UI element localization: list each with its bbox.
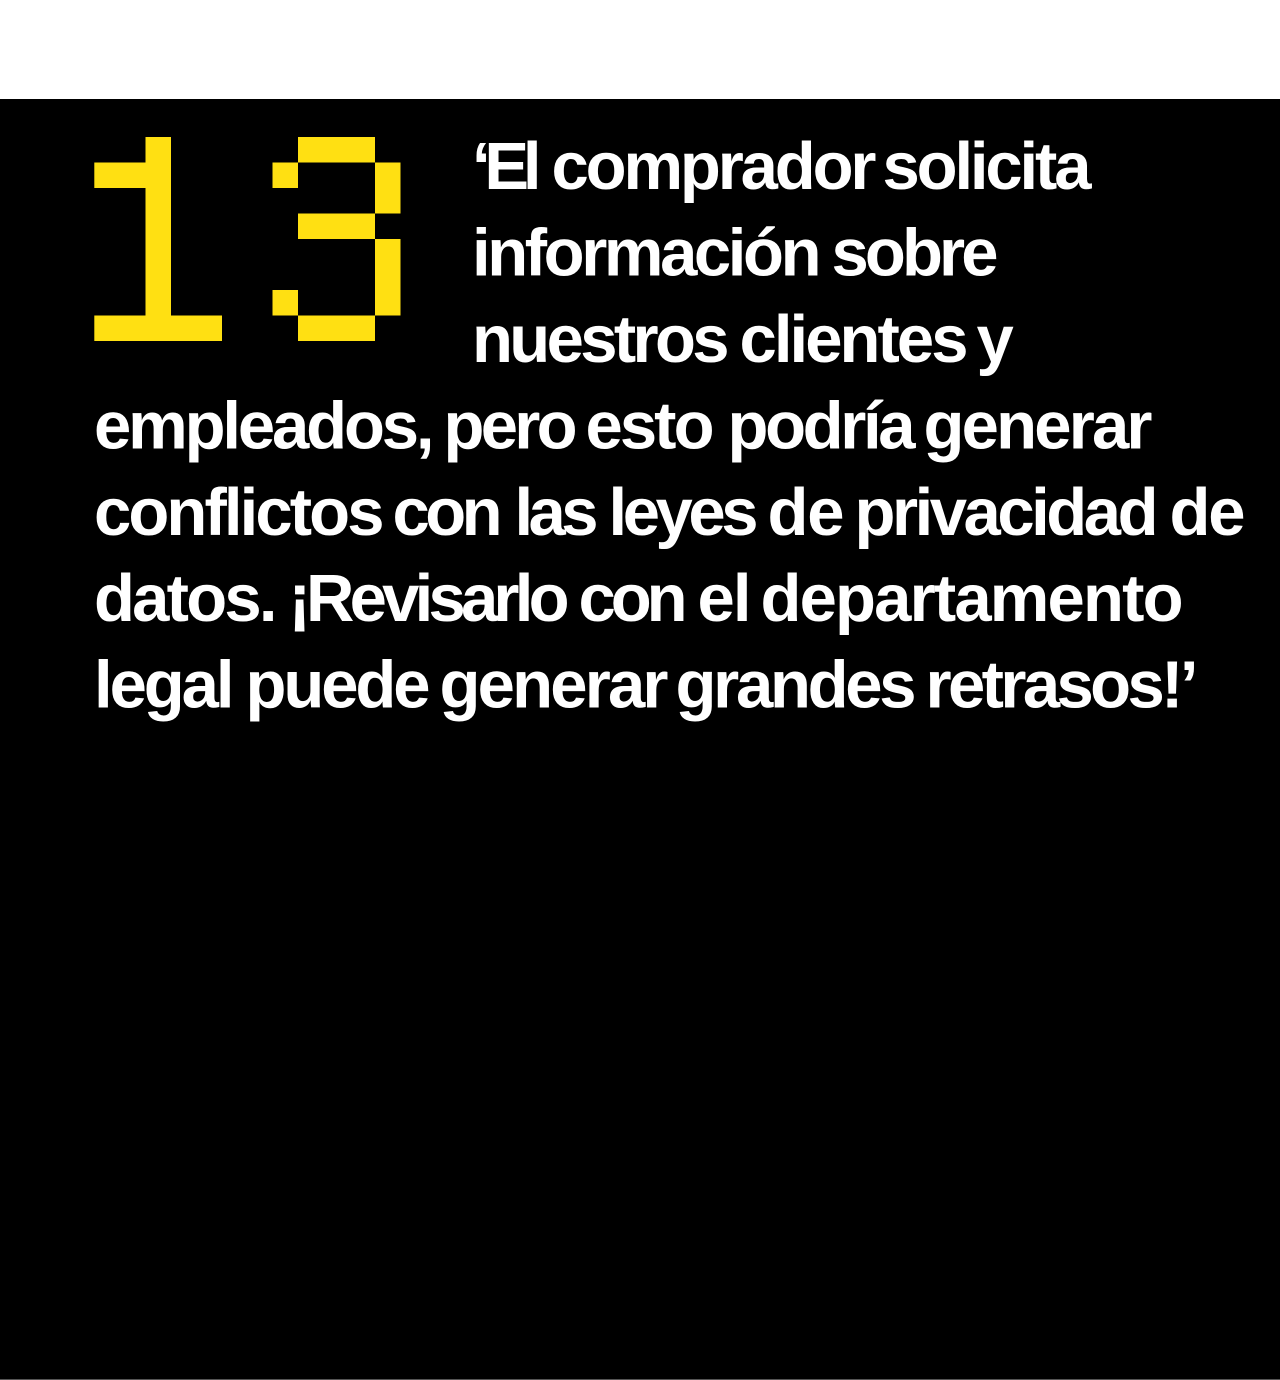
quote text: ‘El	[472, 129, 542, 204]
quote text: datos.	[94, 561, 278, 636]
quote text: legal	[94, 648, 234, 722]
quote text	[94, 129, 1246, 722]
quote text: de	[1170, 475, 1246, 550]
quote text: departamento	[760, 561, 1184, 636]
quote text: generar	[440, 648, 668, 722]
quote text: nuestros	[472, 302, 730, 377]
quote text: solicita	[882, 129, 1092, 204]
quote text: pero	[444, 388, 578, 464]
quote text: grandes	[676, 648, 916, 722]
quote text: información	[472, 216, 822, 290]
quote text: retrasos!’	[926, 648, 1198, 722]
quote text: el	[698, 561, 752, 636]
quote text: clientes	[740, 302, 968, 377]
quote text: generar	[924, 388, 1152, 464]
quote text: podría	[728, 388, 916, 464]
quote text: con	[392, 475, 502, 550]
quote text: ¡Revisarlo	[288, 561, 570, 636]
quote text: puede	[246, 648, 430, 722]
quote text: y	[976, 302, 1014, 377]
quote text: esto	[586, 388, 714, 464]
quote text: conflictos	[94, 475, 384, 550]
quote text: de	[768, 475, 844, 550]
quote text: empleados,	[94, 388, 434, 464]
quote text: leyes	[608, 475, 758, 550]
quote text: con	[578, 561, 688, 636]
quote text: privacidad	[854, 475, 1158, 550]
quote text: las	[514, 475, 598, 550]
pixel number 13	[94, 137, 401, 341]
quote text: comprador	[552, 129, 876, 204]
quote text: sobre	[832, 216, 998, 290]
